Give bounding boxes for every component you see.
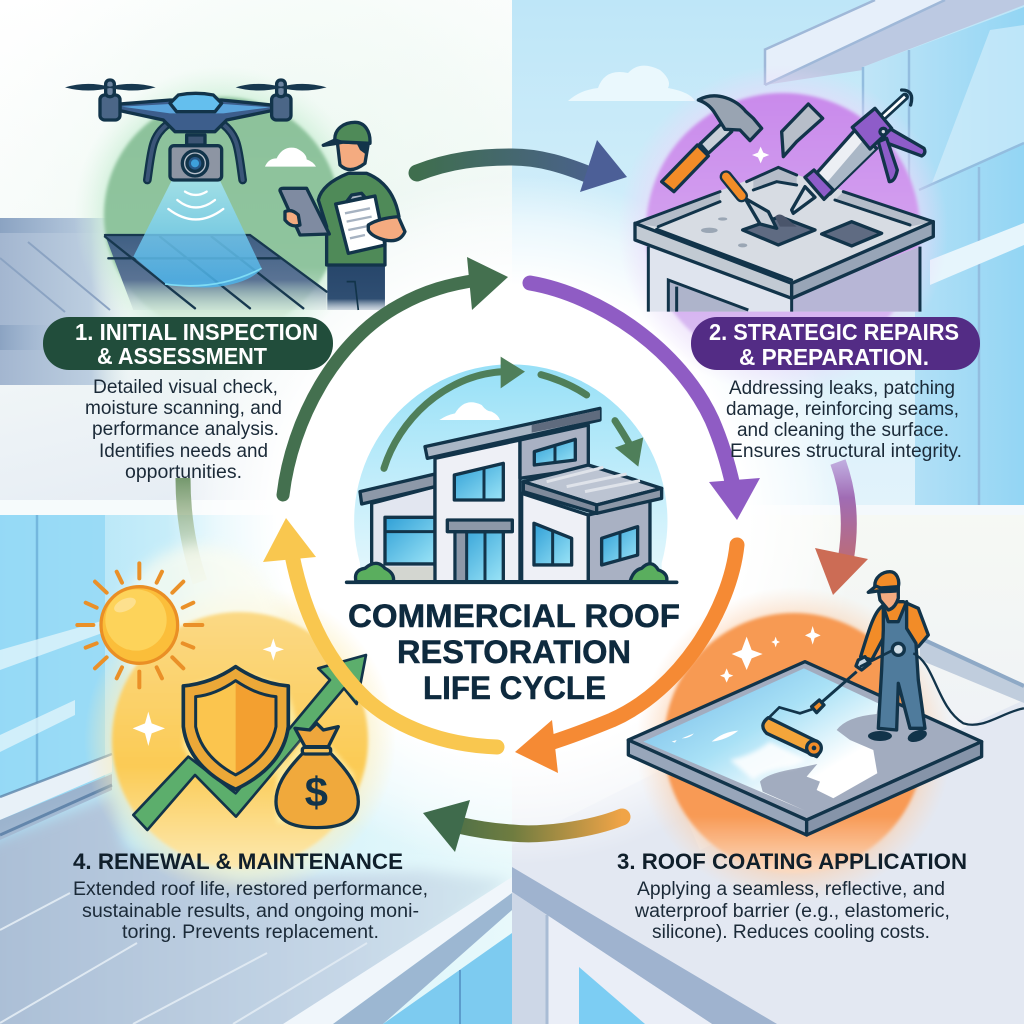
cloud [439,402,500,420]
money bag [277,727,357,823]
bottom-right building [512,638,1024,1024]
door [455,532,503,582]
panel: step 4 renewal [77,545,396,896]
arrow: inspection to repairs [417,140,627,192]
arrow: yellow [263,518,497,747]
hammer [700,122,732,153]
label: step 4 heading: 4. RENEWAL & MAINTENANCE [73,849,403,874]
arrow: repairs to coating [815,462,868,595]
label: step 2 pill [691,317,980,370]
label: step 3 heading: 3. ROOF COATING APPLICATION [617,849,967,874]
text: step 2 description [726,378,962,462]
hose [913,653,1024,725]
panel: step 3 coating [628,572,1024,903]
arrow: orange [515,545,737,773]
roller [767,707,820,720]
illustration: drone, roof and inspector [65,80,405,310]
large cycle arrows [263,257,760,773]
label: step 1 pill: & ASSESSMENT [97,343,267,369]
icon: purple backdrop circle [618,65,948,395]
label: step 2 pill: & PREPARATION. [739,344,929,370]
text: step 1 description: Detailed visual check, [93,377,278,398]
shield [183,667,288,789]
small connecting arrows [183,140,868,852]
label: step 1 pill: 1. INITIAL INSPECTION [75,319,318,345]
label: step 2 pill: 2. STRATEGIC REPAIRS [709,319,959,345]
text: step 4 description: sustainable results, and ongoing moni- [82,901,419,922]
slab [635,168,933,283]
heading: centre title [348,598,680,706]
text: step 2 description: Addressing leaks, patching [729,378,955,399]
tablet [280,188,329,235]
panel: step 2 repairs [618,65,948,395]
arrow: purple [530,283,760,520]
label: step 1 pill [43,317,333,370]
text: step 2 description: Ensures structural integrity. [730,441,962,462]
shrubs [356,563,394,582]
text: step 1 description: Identifies needs and [99,441,268,462]
heading: centre title: RESTORATION [397,634,631,670]
sun [101,587,178,663]
heading: centre title: LIFE CYCLE [423,670,606,706]
text: step 3 description: Applying a seamless, reflective, and [637,879,945,900]
soft glow behind icons [183,670,297,803]
text: step 4 description [73,879,428,943]
growth arrow [133,655,366,830]
right wing [522,493,588,582]
sparkle [752,147,769,163]
patches [743,217,815,245]
text: step 1 description: opportunities. [125,462,242,483]
illustration: central building [347,357,677,582]
text: step 3 description: silicone). Reduces cooling costs. [652,922,930,943]
bottom-left building [0,515,512,1024]
putty blade [782,104,823,157]
sky circle [354,364,667,582]
heading: centre title: COMMERCIAL ROOF [348,598,680,634]
drone legs [147,125,243,180]
scraper [745,198,777,228]
panel: step 1 inspection [65,66,405,362]
camera [187,135,205,145]
text: step 4 description: toring. Prevents replacement. [122,922,379,943]
slab [628,662,982,820]
illustration: sun, shield, growth arrow, money bag: $ [305,769,328,816]
caulk gun [883,97,905,117]
arrow: renewal to inspection [183,478,200,582]
text: step 1 description: moisture scanning, and [85,398,282,419]
top-left roof [0,218,130,385]
centre white glow [167,175,857,865]
clipboard [336,196,385,253]
illustration: sun, shield, growth arrow, money bag [77,563,366,830]
middle tower [435,440,520,582]
illustration: worker rolling coating [628,572,1024,835]
left band [0,500,512,515]
left wing [372,487,435,582]
text: step 3 description [634,879,950,943]
text: step 2 description: and cleaning the surface. [737,420,949,441]
text: step 1 description [85,377,282,483]
text: step 4 description: Extended roof life, restored performance, [73,879,428,900]
building below slab [648,247,920,312]
top-right building [512,0,1024,515]
text: step 1 description: performance analysis. [92,419,279,440]
icon: yellow backdrop circle [84,545,396,896]
head and cap [337,142,368,170]
cycle arrows in sky [384,372,503,468]
arrow: green [283,257,508,495]
cloud [265,148,316,167]
icon: green backdrop circle [74,66,370,362]
illustration: tools and roof patch [635,90,933,312]
text: step 3 description: waterproof barrier (e.g., elastomeric, [634,901,950,922]
ground [347,577,677,588]
worker [861,602,928,660]
icon: orange backdrop circle [636,587,952,903]
sparkles [720,626,821,683]
motors and propellers [100,95,120,120]
sparkles [133,638,284,746]
arrow: coating to renewal [423,800,622,852]
text: step 2 description: damage, reinforcing seams, [726,399,959,420]
drone body [120,100,272,132]
inspector body [327,265,385,310]
roof [105,235,327,310]
